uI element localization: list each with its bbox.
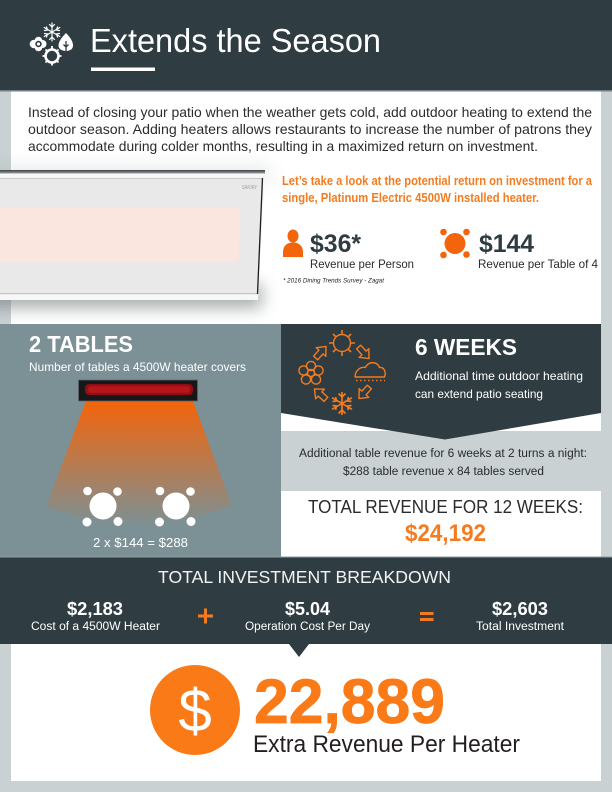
intro paragraph: accommodate during colder months, resulting in a maximized return on investment. xyxy=(28,138,538,154)
ROI intro callout xyxy=(282,174,593,205)
description xyxy=(415,369,583,401)
plus sign xyxy=(198,608,213,624)
icon: dollar coin: $ xyxy=(178,677,212,744)
icon: sun xyxy=(329,330,355,356)
arrow: summer to fall xyxy=(354,343,374,363)
value: $36* xyxy=(310,230,361,258)
title: Extends the Season xyxy=(90,22,381,59)
heading: 6 WEEKS xyxy=(415,334,517,360)
item: operation cost: Operation Cost Per Day xyxy=(245,621,370,633)
total revenue value: $24,192 xyxy=(405,520,486,547)
panel: 6 weeks xyxy=(281,324,601,440)
item: operation cost xyxy=(245,598,370,633)
icon: cloud and rain xyxy=(355,363,385,380)
header band xyxy=(0,0,612,92)
item: operation cost: $5.04 xyxy=(285,598,331,619)
pointer xyxy=(289,644,309,657)
icon: season cycle xyxy=(299,330,385,415)
arrow: winter to spring xyxy=(310,384,330,404)
panel: 2 tables xyxy=(0,324,281,558)
heating element xyxy=(0,207,240,262)
panel: gray table revenue band xyxy=(281,431,601,491)
value: $144 xyxy=(479,230,534,258)
extra revenue result xyxy=(150,665,520,758)
item: heater cost: $2,183 xyxy=(67,598,123,619)
total revenue xyxy=(308,496,583,547)
icon: table one xyxy=(82,487,122,526)
band line two: $288 table revenue x 84 tables served xyxy=(343,466,544,478)
stat: revenue per table xyxy=(440,229,598,271)
subheading: Number of tables a 4500W heater covers xyxy=(29,360,246,374)
intro paragraph: outdoor season. Adding heaters allows restaurants to increase the number of patrons they xyxy=(28,121,592,137)
icon: flower xyxy=(30,37,46,51)
heading: 2 TABLES xyxy=(29,331,133,357)
result value: 22,889 xyxy=(254,667,445,737)
icon: dollar coin xyxy=(150,665,240,755)
heater photo xyxy=(0,164,270,308)
label: Revenue per Table of 4 xyxy=(478,257,598,271)
icon: leaf xyxy=(58,33,73,54)
footnote: * 2016 Dining Trends Survey - Zagat xyxy=(283,278,384,284)
item: total investment xyxy=(476,598,565,633)
arrow: spring to summer xyxy=(311,342,331,362)
heater logo: SAVORY xyxy=(242,185,257,191)
item: total investment: Total Investment xyxy=(476,621,565,633)
intro paragraph: Instead of closing your patio when the weather gets cold, add outdoor heating to extend the xyxy=(28,104,592,120)
item: total investment: $2,603 xyxy=(492,598,548,619)
stat: revenue per person xyxy=(283,230,414,271)
icon: gear sun xyxy=(42,46,62,66)
equation: 2 x $144 = $288 xyxy=(93,535,188,550)
label: Revenue per Person xyxy=(310,257,414,271)
total revenue label: TOTAL REVENUE FOR 12 WEEKS: xyxy=(308,496,583,517)
description: Additional time outdoor heating xyxy=(415,369,583,383)
equals sign xyxy=(420,614,434,620)
band line one: Additional table revenue for 6 weeks at 2 turns a night: xyxy=(299,448,587,460)
title underline xyxy=(91,68,155,71)
result label: Extra Revenue Per Heater xyxy=(253,731,520,758)
icon: four seasons xyxy=(30,23,73,66)
icon: flower xyxy=(299,361,323,384)
icon: table xyxy=(440,229,470,258)
icon: person xyxy=(283,230,303,257)
heading: TOTAL INVESTMENT BREAKDOWN xyxy=(158,567,451,587)
icon: red heater xyxy=(78,380,198,401)
intro paragraph xyxy=(28,104,592,154)
item: heater cost: Cost of a 4500W Heater xyxy=(31,621,160,633)
item: heater cost xyxy=(31,598,160,633)
description: can extend patio seating xyxy=(415,387,543,401)
ROI intro callout: single, Platinum Electric 4500W installed heater. xyxy=(282,191,539,205)
heat beam xyxy=(46,401,232,527)
icon: snowflake xyxy=(44,23,60,41)
arrow: fall to winter xyxy=(354,383,374,403)
icon: table two xyxy=(155,487,196,526)
panel: total investment breakdown xyxy=(0,556,612,657)
icon: snowflake xyxy=(332,392,352,415)
